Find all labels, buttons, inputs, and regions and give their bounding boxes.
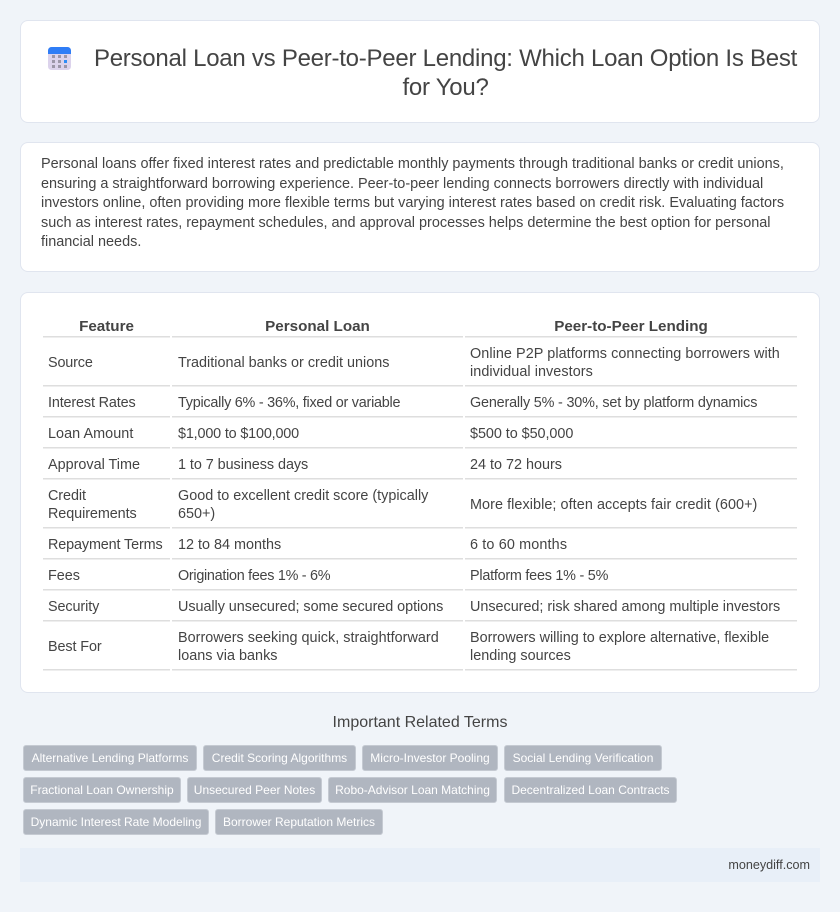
footer credit: moneydiff.com [728, 858, 810, 872]
tag: Micro-Investor Pooling [370, 751, 490, 765]
row: Credit Requirements: More flexible; often accepts fair credit (600+) [470, 497, 757, 513]
row: Best For: Borrowers seeking quick, straightforward [178, 630, 439, 646]
row: Credit Requirements: Good to excellent credit score (typically [178, 488, 428, 504]
row: Best For [48, 630, 769, 664]
tag: Alternative Lending Platforms [32, 751, 188, 765]
row: Loan Amount: $500 to $50,000 [470, 426, 573, 442]
panel: intro text [20, 142, 820, 272]
row: Source: Traditional banks or credit unions [178, 355, 389, 371]
row: Approval Time [48, 457, 562, 473]
row: Repayment Terms [48, 537, 567, 553]
tag: Fractional Loan Ownership [30, 783, 174, 797]
tag: Borrower Reputation Metrics [223, 815, 375, 829]
intro paragraph [41, 156, 784, 250]
tag: Credit Scoring Algorithms [212, 751, 347, 765]
row: Source: individual investors [470, 364, 593, 380]
row: Source: Online P2P platforms connecting borrowers with [470, 346, 780, 362]
row: Approval Time: Approval Time [48, 457, 140, 473]
intro paragraph: such as interest rates, repayment schedules, and approval processes helps determine the best option for personal [41, 214, 771, 230]
tag [23, 745, 197, 771]
intro paragraph: investors online, often providing more flexible terms but varying interest rates based on credit risk. Evaluating factors [41, 195, 784, 211]
title: for You? [402, 74, 489, 101]
row: Loan Amount [48, 426, 573, 442]
panel: title card [20, 20, 820, 123]
row: Best For: loans via banks [178, 648, 278, 664]
row: Security [48, 599, 780, 615]
row: Best For: Best For [48, 639, 102, 655]
row: Interest Rates: Generally 5% - 30%, set by platform dynamics [470, 395, 757, 411]
table header: Feature [79, 318, 134, 335]
row: Credit Requirements: Credit [48, 488, 86, 504]
row: Fees: Fees [48, 568, 80, 584]
tag [504, 777, 677, 803]
tag [187, 777, 322, 803]
tag: Unsecured Peer Notes [194, 783, 315, 797]
row: Repayment Terms: 12 to 84 months [178, 537, 281, 553]
tag: Social Lending Verification [513, 751, 653, 765]
footer [20, 848, 820, 882]
tag [23, 809, 209, 835]
row: Fees: Platform fees 1% - 5% [470, 568, 608, 584]
intro paragraph: Personal loans offer fixed interest rates and predictable monthly payments through traditional banks or credit unions, [41, 156, 784, 172]
row: Best For: Borrowers willing to explore alternative, flexible [470, 630, 769, 646]
row: Interest Rates [48, 395, 757, 411]
table header [79, 318, 708, 335]
row: Security: Unsecured; risk shared among multiple investors [470, 599, 780, 615]
intro paragraph: ensuring a straightforward borrowing experience. Peer-to-peer lending connects borrowers directly with individual [41, 176, 763, 192]
row: Loan Amount: $1,000 to $100,000 [178, 426, 299, 442]
row: Approval Time: 24 to 72 hours [470, 457, 562, 473]
tag [203, 745, 356, 771]
row: Interest Rates: Typically 6% - 36%, fixed or variable [178, 395, 400, 411]
row: Security: Usually unsecured; some secured options [178, 599, 443, 615]
row: Interest Rates: Interest Rates [48, 395, 135, 411]
tag [23, 777, 181, 803]
row: Repayment Terms: Repayment Terms [48, 537, 163, 553]
tag: Robo-Advisor Loan Matching [335, 783, 490, 797]
row: Loan Amount: Loan Amount [48, 426, 133, 442]
icon: calendar [48, 47, 71, 70]
row: Source [48, 346, 780, 380]
tag [328, 777, 497, 803]
tag [362, 745, 498, 771]
row: Repayment Terms: 6 to 60 months [470, 537, 567, 553]
row: Credit Requirements: 650+) [178, 506, 215, 522]
row: Credit Requirements [48, 488, 757, 522]
tag [504, 745, 662, 771]
title: Personal Loan vs Peer-to-Peer Lending: Which Loan Option Is Best [94, 45, 797, 72]
row: Credit Requirements: Requirements [48, 506, 137, 522]
row: Security: Security [48, 599, 99, 615]
row: Fees [48, 568, 608, 584]
tags: related terms [23, 745, 677, 835]
comparison table [79, 318, 708, 335]
tag [215, 809, 383, 835]
table header: Peer-to-Peer Lending [554, 318, 708, 335]
row: Source: Source [48, 355, 93, 371]
row: Fees: Origination fees 1% - 6% [178, 568, 330, 584]
tag: Decentralized Loan Contracts [511, 783, 670, 797]
table header: Personal Loan [265, 318, 370, 335]
tag: Dynamic Interest Rate Modeling [31, 815, 201, 829]
title [94, 45, 798, 101]
row: Approval Time: 1 to 7 business days [178, 457, 308, 473]
row: Best For: lending sources [470, 648, 571, 664]
intro paragraph: financial needs. [41, 234, 141, 250]
heading: related terms: Important Related Terms [333, 714, 507, 731]
panel: comparison table [20, 292, 820, 693]
